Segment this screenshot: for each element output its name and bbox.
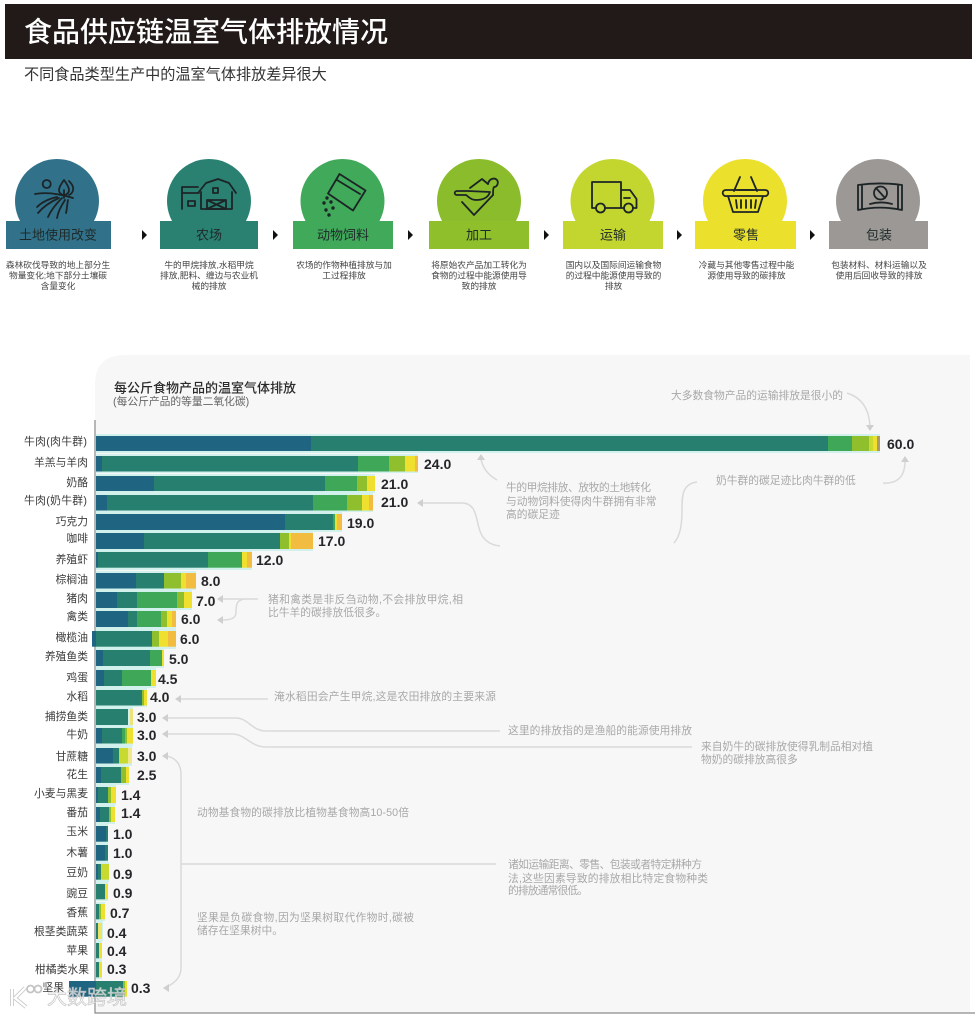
annotation: dairy vs plant milk: 来自奶牛的碳排放使得乳制品相对植 xyxy=(701,740,873,753)
row: chocolate xyxy=(56,512,374,532)
stage: land use change: 土地使用改变 xyxy=(19,228,97,242)
row: milk: 牛奶 xyxy=(66,727,88,741)
row: eggs: 鸡蛋 xyxy=(66,670,88,684)
row: dairy beef xyxy=(24,493,408,512)
stage: animal feed: 工过程排放 xyxy=(322,270,366,280)
row: root vegetables xyxy=(34,921,127,941)
row: coffee: 咖啡 xyxy=(66,531,88,545)
icon: feed bag xyxy=(323,174,366,216)
stage: animal feed: 动物饲料 xyxy=(317,228,369,242)
row: root vegetables: 0.4 xyxy=(107,925,127,941)
arrow xyxy=(677,230,682,240)
row: milk: 3.0 xyxy=(137,727,157,743)
stage: transport: 的过程中能源使用导致的 xyxy=(566,270,662,280)
stage: packaging: 使用后回收导致的排放 xyxy=(836,270,923,280)
row: eggs: 4.5 xyxy=(158,671,178,687)
row: capture fish xyxy=(45,707,157,727)
stage: transport xyxy=(563,159,663,291)
row: farmed fish: 养殖鱼类 xyxy=(45,649,88,663)
row: poultry: 禽类 xyxy=(66,609,88,623)
row: farmed fish xyxy=(45,648,189,668)
row: soy milk xyxy=(66,862,133,882)
row: cheese: 奶酪 xyxy=(66,475,88,489)
row: olive oil: 6.0 xyxy=(180,631,200,647)
arrow xyxy=(544,230,549,240)
annotation: transport is small xyxy=(671,389,874,431)
row: corn: 1.0 xyxy=(113,826,133,842)
annotation: dairy herd lower footprint xyxy=(674,456,909,543)
icon: truck xyxy=(592,182,636,212)
stage: land use change xyxy=(6,159,111,291)
row: soy milk: 0.9 xyxy=(113,866,133,882)
row: citrus: 柑橘类水果 xyxy=(35,962,89,976)
row: nuts: 0.3 xyxy=(131,980,151,996)
row: apples: 0.4 xyxy=(107,943,127,959)
stage: packaging: 包装 xyxy=(866,228,892,242)
row: citrus: 0.3 xyxy=(107,961,127,977)
row: olive oil xyxy=(56,629,200,649)
chart unit: (每公斤产品的等量二氧化碳) xyxy=(113,395,249,408)
icon: basket xyxy=(723,177,768,212)
row: root vegetables: 根茎类蔬菜 xyxy=(34,924,88,938)
row: cassava: 木薯 xyxy=(66,846,88,859)
row: wheat and rye: 1.4 xyxy=(121,787,141,803)
row: cane sugar: 甘蔗糖 xyxy=(56,749,88,763)
stage: farm: 农场 xyxy=(196,228,222,242)
watermark: 大数跨境 xyxy=(47,986,127,1009)
row: banana: 0.7 xyxy=(110,905,130,921)
row: dairy beef: 21.0 xyxy=(381,494,408,510)
annotation: flooded rice: 淹水稻田会产生甲烷,这是农田排放的主要来源 xyxy=(274,690,496,703)
row: cane sugar xyxy=(56,746,157,766)
row: nuts xyxy=(42,980,151,997)
stage: land use change: 森林砍伐导致的地上部分生 xyxy=(6,259,110,270)
stage: transport: 运输 xyxy=(600,228,626,242)
annotation: dairy vs plant milk xyxy=(162,730,873,766)
row: peanuts: 2.5 xyxy=(137,767,157,783)
row: citrus xyxy=(35,960,127,979)
icon: food processing xyxy=(455,179,498,215)
panel: emissions chart background xyxy=(95,355,970,1013)
annotation: fishing vessels: 这里的排放指的是渔船的能源使用排放 xyxy=(508,724,692,737)
annotation: other factors xyxy=(508,858,708,897)
stage: land use change: 物量变化;地下部分土壤碳 xyxy=(9,270,107,280)
row: rice: 水稻 xyxy=(66,690,88,703)
row: capture fish: 捕捞鱼类 xyxy=(45,709,88,723)
row: farmed fish: 5.0 xyxy=(169,651,189,667)
arrow xyxy=(810,230,815,240)
row: soy milk: 豆奶 xyxy=(66,865,88,879)
annotation: fishing vessels xyxy=(162,714,692,737)
stage: farm: 械的排放 xyxy=(192,280,227,291)
row: peas: 豌豆 xyxy=(66,886,88,900)
arrow xyxy=(273,230,278,240)
row: corn xyxy=(66,824,133,844)
row: peanuts: 花生 xyxy=(66,767,88,781)
annotation: dairy herd lower footprint: 奶牛群的碳足迹比肉牛群的低 xyxy=(716,474,856,487)
row: peas: 0.9 xyxy=(113,885,133,901)
stage: processing: 将原始农产品加工转化为 xyxy=(431,259,527,270)
stage: animal feed xyxy=(293,159,393,280)
annotation: pork and poultry: 比牛羊的碳排放低很多。 xyxy=(268,606,386,619)
row: capture fish: 3.0 xyxy=(137,709,157,725)
row: banana xyxy=(66,902,130,921)
row: palm oil xyxy=(56,571,221,590)
row: farmed shrimp: 养殖虾 xyxy=(56,552,88,566)
stage: transport: 国内以及国际间运输食物 xyxy=(566,259,662,270)
row: corn: 玉米 xyxy=(66,825,88,838)
annotation: methane in beef: 高的碳足迹 xyxy=(506,508,560,521)
row: apples xyxy=(66,941,127,960)
row: lamb: 羊羔与羊肉 xyxy=(34,455,88,469)
row: beef herd xyxy=(24,434,914,453)
stage: processing: 加工 xyxy=(466,228,492,242)
annotation: nuts negative carbon: 储存在坚果树中。 xyxy=(197,924,283,937)
row: chocolate: 巧克力 xyxy=(56,515,88,528)
process flow: supply chain stages xyxy=(6,159,928,291)
stage: retail: 冷藏与其他零售过程中能 xyxy=(699,259,795,270)
row: poultry: 6.0 xyxy=(181,611,201,627)
stage: land use change: 含量变化 xyxy=(41,280,76,291)
stage: animal feed: 农场的作物种植排放与加 xyxy=(296,259,392,270)
stage: retail: 源使用导致的碳排放 xyxy=(707,270,786,280)
row: farmed shrimp xyxy=(56,550,283,570)
stage: processing xyxy=(429,159,529,291)
bar chart: emissions per kg of food xyxy=(24,434,914,997)
row: pork: 7.0 xyxy=(196,593,216,609)
annotation: animal vs plant: 动物基食物的碳排放比植物基食物高10-50倍 xyxy=(197,806,409,819)
header bar with title: 食品供应链温室气体排放情况 xyxy=(24,16,388,48)
stage: retail xyxy=(695,159,796,280)
row: cane sugar: 3.0 xyxy=(137,748,157,764)
arrow xyxy=(142,230,147,240)
row: coffee xyxy=(66,531,345,551)
icon: field and trees xyxy=(35,180,73,218)
stage: packaging xyxy=(829,159,928,280)
row: cheese: 21.0 xyxy=(381,476,408,492)
annotation: other factors: 诸如运输距离、零售、包装或者特定耕种方 xyxy=(508,858,702,871)
arrow xyxy=(408,230,413,240)
stage: farm: 牛的甲烷排放,水稻甲烷 xyxy=(164,259,254,270)
row: cheese xyxy=(66,474,408,493)
annotation: other factors: 法,这些因素导致的排放相比特定食物种类 xyxy=(508,872,708,885)
row: milk xyxy=(66,726,157,746)
annotation: transport is small: 大多数食物产品的运输排放是很小的 xyxy=(671,389,843,402)
row: pork: 猪肉 xyxy=(66,592,88,605)
stage: farm xyxy=(160,159,258,291)
annotation: dairy vs plant milk: 物奶的碳排放高很多 xyxy=(701,753,798,766)
annotation: pork and poultry xyxy=(217,593,463,624)
row: lamb xyxy=(34,454,451,473)
chart title: 每公斤食物产品的温室气体排放 xyxy=(114,380,296,396)
chart axes xyxy=(95,420,975,1013)
row: farmed shrimp: 12.0 xyxy=(256,552,283,568)
annotation: methane in beef: 牛的甲烷排放、放牧的土地转化 xyxy=(506,481,651,494)
row: pork xyxy=(66,590,216,610)
header bar with title xyxy=(5,4,972,59)
row: rice xyxy=(66,688,170,707)
stage: retail: 零售 xyxy=(733,228,759,242)
row: rice: 4.0 xyxy=(150,689,170,705)
row: tomato: 番茄 xyxy=(66,805,88,819)
stage: farm: 排放,肥料、缠边与农业机 xyxy=(160,270,258,280)
row: cassava: 1.0 xyxy=(113,845,133,861)
row: cassava xyxy=(66,843,133,863)
row: beef herd: 60.0 xyxy=(887,436,914,452)
row: wheat and rye xyxy=(34,785,141,805)
annotation: other factors: 的排放通常很低。 xyxy=(508,884,588,897)
subtitle: 不同食品类型生产中的温室气体排放差异很大 xyxy=(24,66,327,84)
row: eggs xyxy=(66,668,178,688)
stage: processing: 食物的过程中能源使用导 xyxy=(431,270,527,280)
row: tomato: 1.4 xyxy=(121,805,141,821)
row: dairy beef: 牛肉(奶牛群) xyxy=(24,493,87,507)
row: coffee: 17.0 xyxy=(318,533,345,549)
row: poultry xyxy=(66,609,201,629)
annotation: methane in beef xyxy=(417,454,657,546)
row: banana: 香蕉 xyxy=(66,906,88,919)
stage: transport: 排放 xyxy=(605,280,622,291)
row: palm oil: 棕榈油 xyxy=(56,572,88,586)
icon: package xyxy=(858,184,902,210)
row: tomato xyxy=(66,805,141,824)
row: wheat and rye: 小麦与黑麦 xyxy=(34,787,88,800)
annotation: nuts negative carbon: 坚果是负碳食物,因为坚果树取代作物时,碳被 xyxy=(197,911,414,924)
row: chocolate: 19.0 xyxy=(347,515,374,531)
annotation: flooded rice xyxy=(175,690,496,703)
icon: barn xyxy=(182,179,236,209)
row: lamb: 24.0 xyxy=(424,456,451,472)
annotation: pork and poultry: 猪和禽类是非反刍动物,不会排放甲烷,相 xyxy=(268,593,463,606)
stage: processing: 致的排放 xyxy=(462,280,497,291)
annotation: methane in beef: 与动物饲料使得肉牛群拥有非常 xyxy=(506,495,657,508)
row: palm oil: 8.0 xyxy=(201,573,221,589)
row: beef herd: 牛肉(肉牛群) xyxy=(24,434,87,448)
row: peas xyxy=(66,882,133,901)
bracket: plant-based foods xyxy=(162,752,496,992)
row: peanuts xyxy=(66,765,157,785)
stage: packaging: 包装材料、材料运输以及 xyxy=(831,259,927,270)
watermark xyxy=(12,986,127,1009)
row: olive oil: 橄榄油 xyxy=(56,630,88,644)
row: nuts: 坚果 xyxy=(42,981,64,994)
row: apples: 苹果 xyxy=(66,943,88,957)
annotation: nuts negative carbon xyxy=(197,911,414,937)
